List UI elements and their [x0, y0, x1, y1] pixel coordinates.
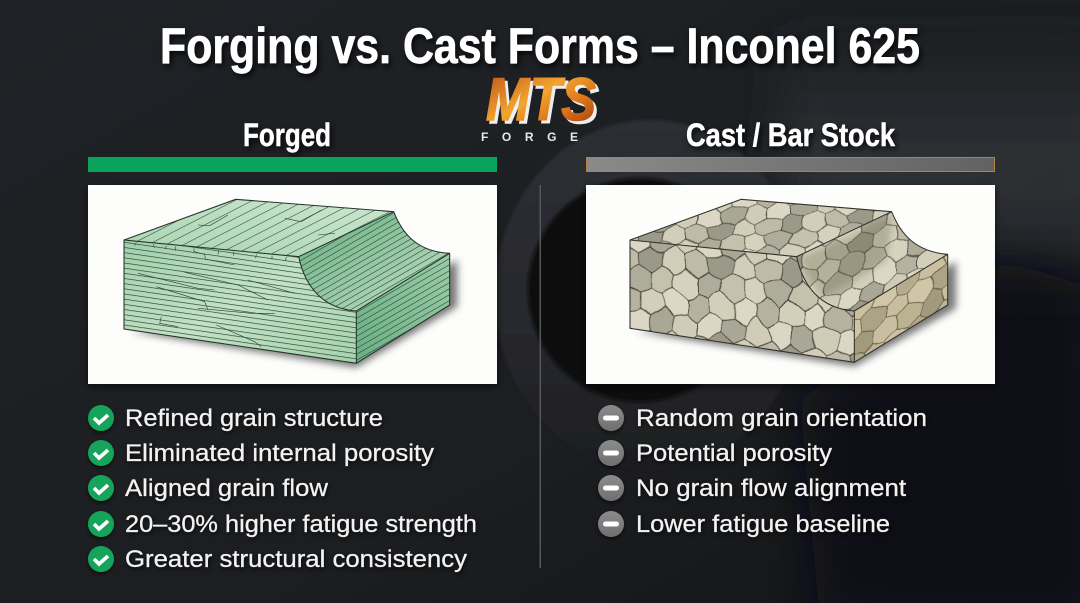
side face cells — [854, 255, 948, 362]
panel: forged grain block — [88, 185, 497, 384]
item: aligned grain flow: Aligned grain flow — [125, 475, 329, 502]
grey bar — [586, 158, 994, 172]
side face — [356, 253, 450, 363]
notch surface — [299, 212, 450, 311]
notch cells — [797, 212, 946, 310]
green bar — [88, 157, 497, 172]
item: lower fatigue baseline: Lower fatigue baseline — [636, 511, 890, 538]
front face — [124, 240, 356, 363]
vertical divider — [540, 185, 541, 568]
heading: Cast / Bar Stock: Cast / Bar Stock — [686, 117, 895, 153]
logo: MTS Forge: FORGE — [481, 130, 578, 144]
logo: MTS Forge: MTS — [489, 69, 599, 136]
list: forged benefits — [88, 405, 477, 573]
item: no grain flow alignment: No grain flow alignment — [636, 475, 906, 502]
panel: cast grain block — [586, 185, 997, 388]
top face cells — [632, 200, 890, 256]
item: eliminated internal porosity: Eliminated internal porosity — [125, 440, 434, 467]
item: random grain orientation: Random grain orientation — [636, 405, 927, 432]
item: fatigue strength: 20–30% higher fatigue strength — [125, 511, 477, 538]
item: refined grain structure: Refined grain structure — [125, 405, 383, 432]
front face cells — [630, 240, 854, 362]
title: Forging vs. Cast Forms – Inconel 625 — [160, 18, 920, 74]
item: structural consistency: Greater structural consistency — [125, 546, 467, 573]
heading: Forged: Forged — [243, 117, 331, 153]
logo: MTS Forge: MTS — [486, 66, 596, 133]
list: cast drawbacks — [598, 405, 927, 538]
item: potential porosity: Potential porosity — [636, 440, 832, 467]
top face — [124, 199, 394, 257]
